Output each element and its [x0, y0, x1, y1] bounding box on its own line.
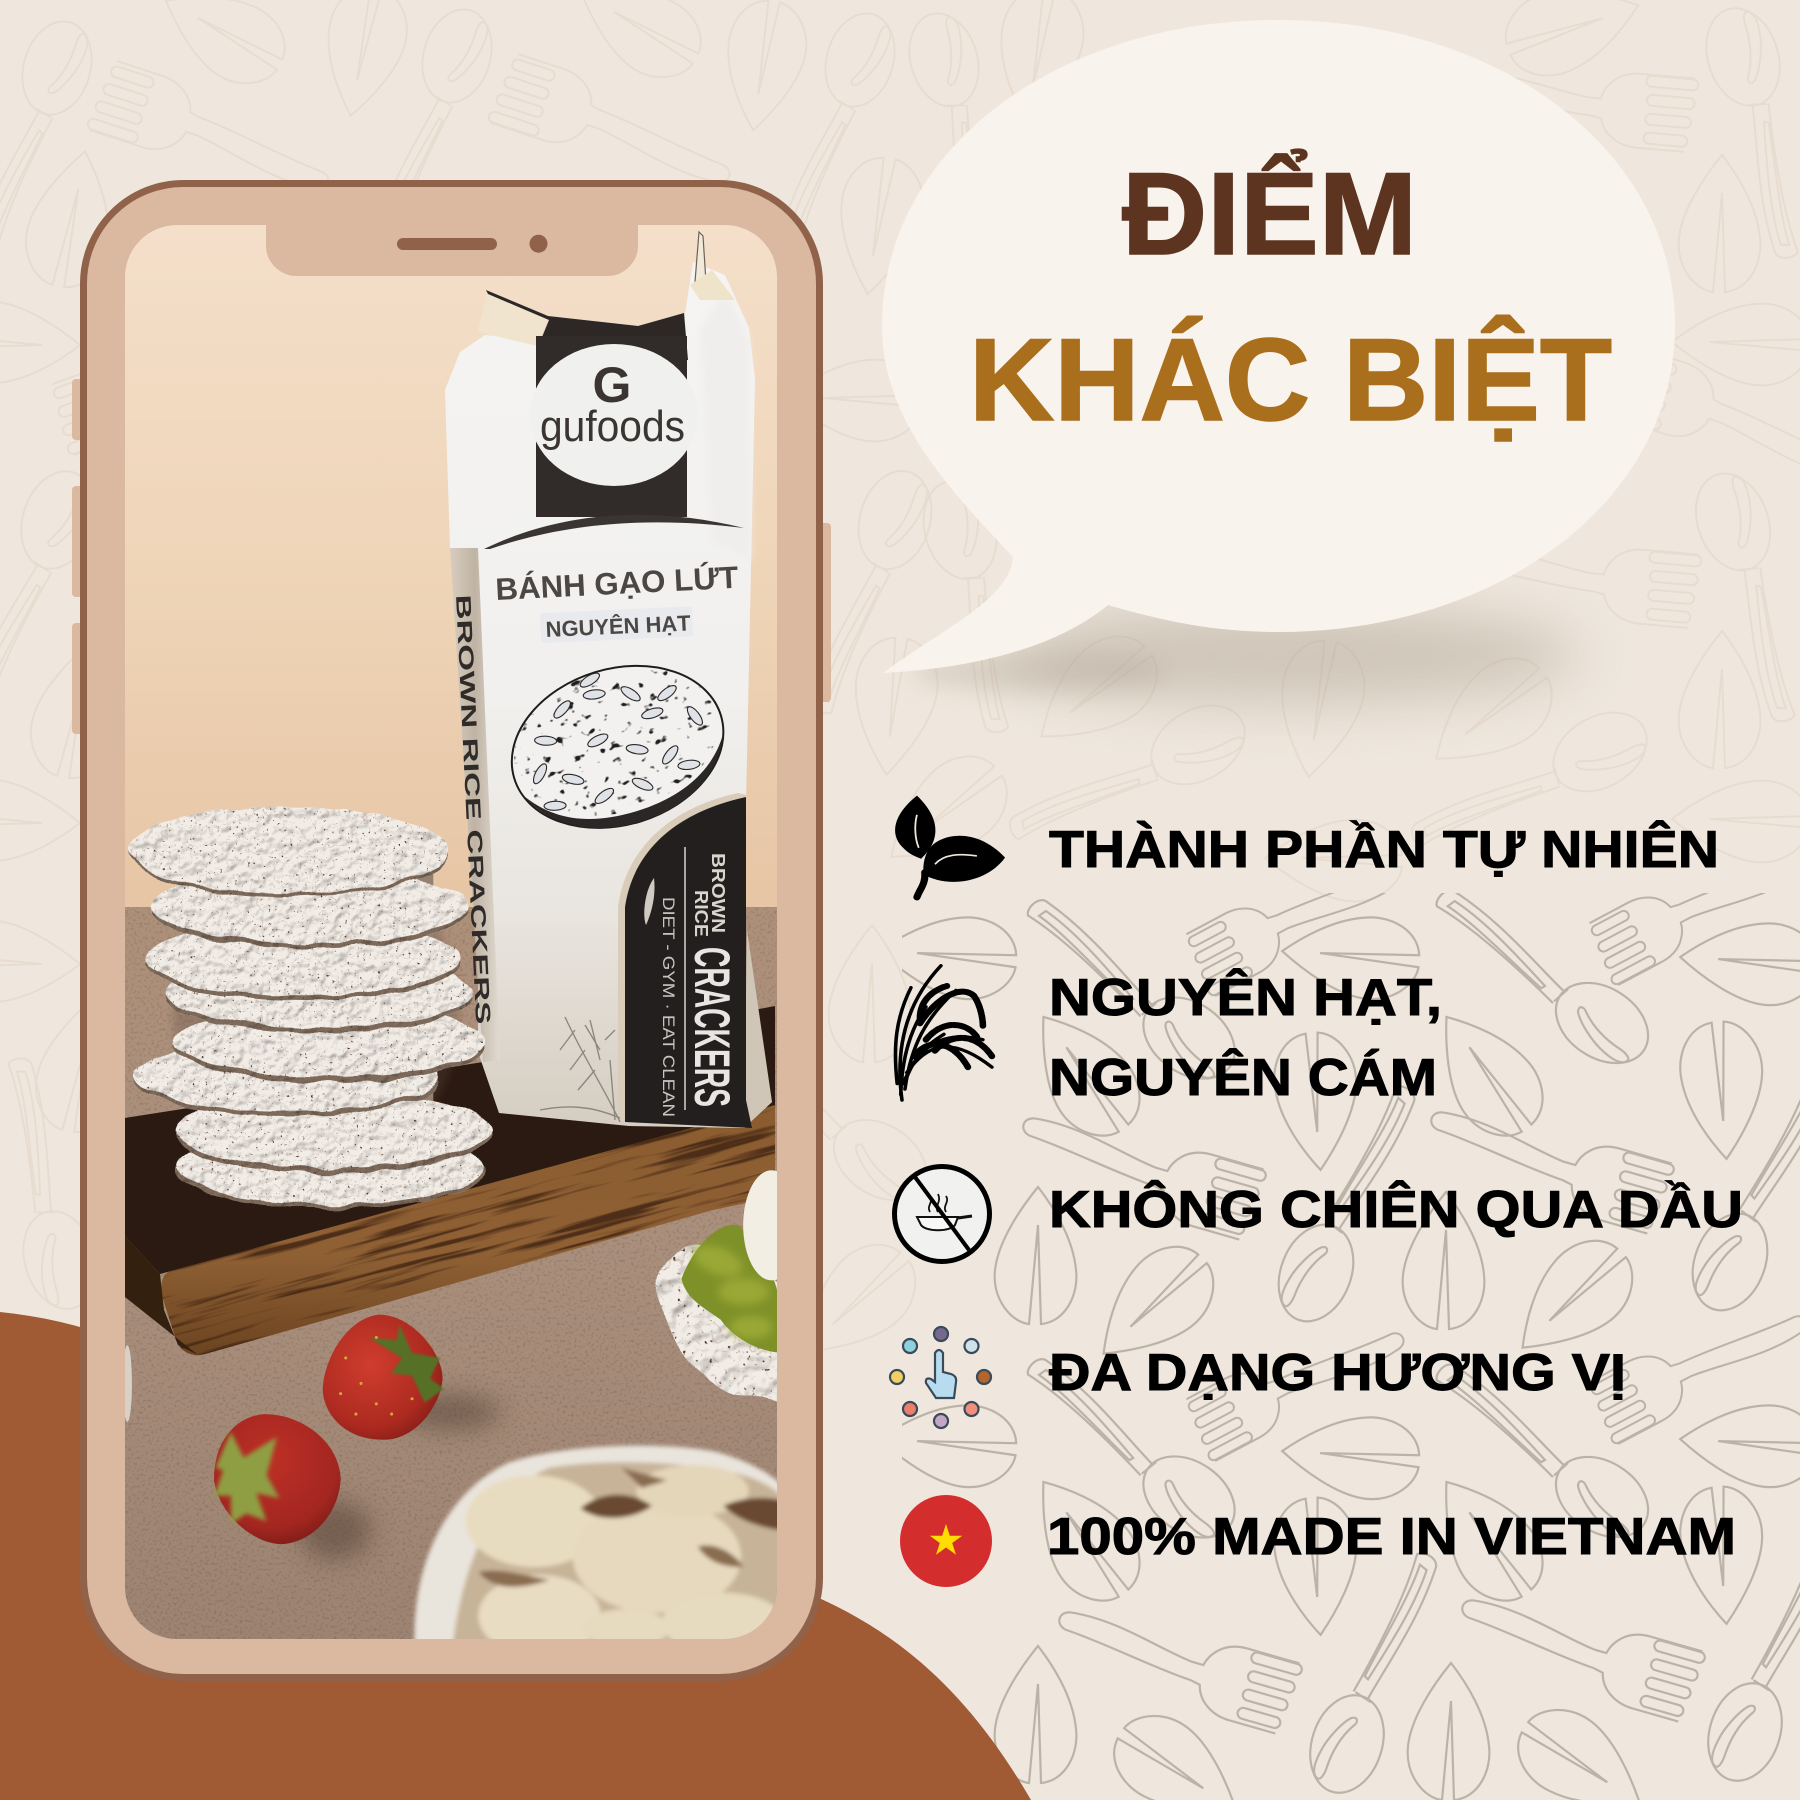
speaker [397, 238, 497, 250]
icon: Vietnam flag [900, 1495, 992, 1587]
package subheading: NGUYÊN HẠT [545, 610, 692, 642]
front strawberry [214, 1414, 341, 1544]
phone mockup [49, 184, 889, 1678]
product package [445, 232, 772, 1128]
speech bubble with title [882, 20, 1675, 703]
brush mark [644, 878, 655, 925]
gufoods logo G: G [593, 357, 631, 413]
curved line [484, 515, 744, 549]
label text crackers: CRACKERS [684, 947, 740, 1107]
icon: no frying [894, 1166, 990, 1262]
package heading: BÁNH GẠO LỨT [495, 559, 739, 607]
logo circle [536, 344, 687, 486]
package top fold [478, 292, 548, 346]
label text rice: RICE [691, 890, 711, 937]
brown corner shape [0, 1312, 1031, 1800]
wooden board [125, 1006, 775, 1355]
icon: rice plant [895, 966, 992, 1100]
wheat illustration [540, 1017, 620, 1122]
text: whole grain line 1: NGUYÊN HẠT, [1049, 968, 1442, 1027]
avocado rice cracker [123, 1170, 810, 1422]
black label [618, 793, 746, 1128]
strawberry shadows [299, 1394, 500, 1560]
icon: flavour choices [890, 1327, 991, 1428]
back strawberry [323, 1315, 444, 1440]
label text diet: DIET - GYM · EAT CLEAN [659, 897, 678, 1117]
text: made in Vietnam: 100% MADE IN VIETNAM [1047, 1508, 1736, 1566]
title line 1: ĐIỂM [1122, 148, 1417, 279]
side buttons [72, 379, 831, 734]
black band [536, 336, 687, 517]
product photo [125, 225, 777, 1639]
text: whole grain line 2: NGUYÊN CÁM [1049, 1048, 1437, 1107]
package top metal tab [695, 232, 706, 282]
phone frame [84, 184, 820, 1678]
text: many flavours: ĐA DẠNG HƯƠNG VỊ [1049, 1344, 1626, 1402]
label line [684, 847, 686, 1110]
notch [266, 222, 638, 276]
icon: leaves [895, 796, 1005, 897]
banana rice cracker [412, 1442, 777, 1639]
feature list [890, 796, 1743, 1587]
stack of rice crackers [130, 807, 490, 1209]
title line 2: KHÁC BIỆT [969, 314, 1612, 445]
camera [530, 235, 548, 253]
illustrated rice cracker [510, 664, 724, 829]
bubble shape [882, 20, 1675, 673]
text: not fried: KHÔNG CHIÊN QUA DẦU [1049, 1180, 1743, 1239]
label text brown: BROWN [708, 853, 728, 933]
text: natural ingredients: THÀNH PHẦN TỰ NHIÊN [1049, 820, 1719, 879]
side text: BROWN RICE CRACKERS [451, 594, 494, 1025]
gufoods wordmark: gufoods [540, 402, 685, 451]
